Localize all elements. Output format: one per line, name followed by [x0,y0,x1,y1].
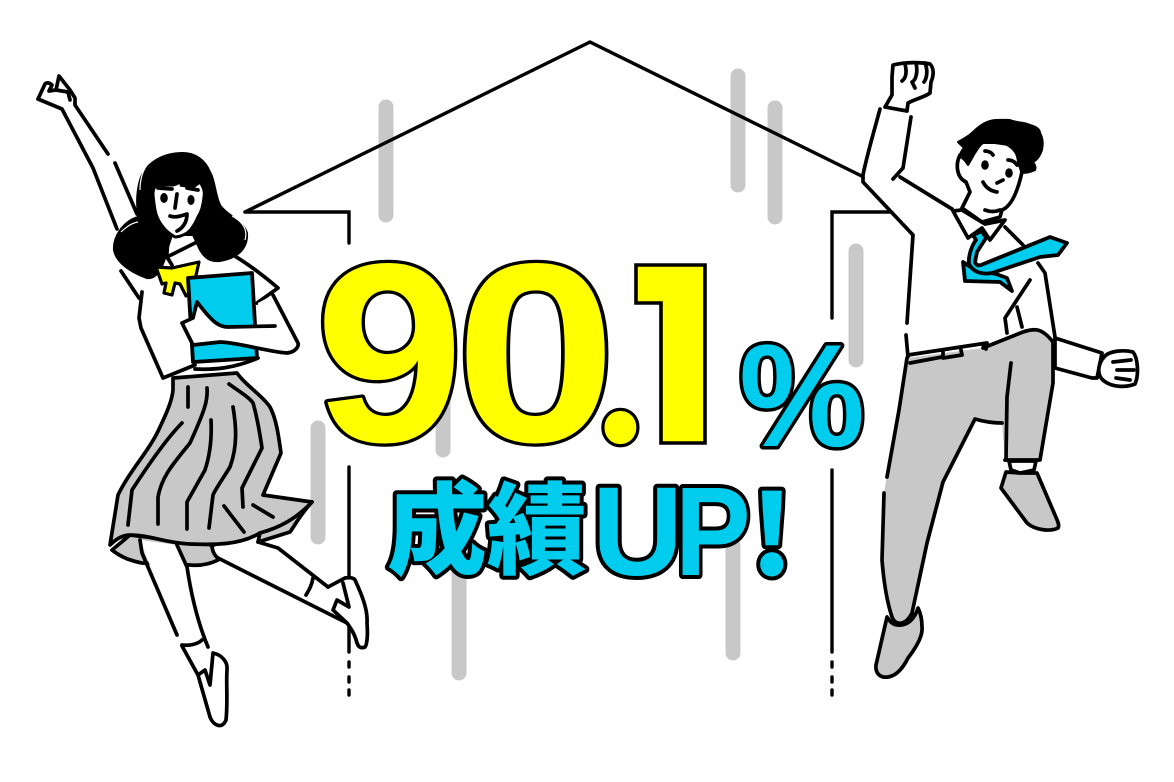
girl raised arm [38,76,137,229]
skirt pleats [128,384,273,532]
girl blouse [121,237,278,378]
girl face [153,178,204,237]
digit 1 [634,263,707,445]
digit 1: 1 [610,210,752,495]
man shirt body [863,109,1055,357]
man blue tie [963,231,1067,291]
girl hair [114,153,247,278]
man neck and head [957,140,1022,222]
man facial features [981,151,1017,212]
man raised arm outlines [863,109,1055,357]
headline 成績UP! [387,447,794,607]
man hair [958,120,1043,173]
man side fist [1099,351,1137,386]
letter U: U [592,461,683,602]
man lower shoe [876,608,922,677]
girl character [38,76,367,726]
man belt [908,343,987,363]
man upper shoe [1001,472,1059,530]
girl legs [140,540,367,726]
man raised fist [885,63,933,111]
man shirt collar [953,210,1005,240]
exclamation mark: ! [750,447,794,607]
letter P: P [675,461,751,602]
girl skirt [110,373,312,545]
man white sock [1009,461,1036,473]
man character [863,63,1137,677]
girl facial features [158,188,198,231]
girl skirt underside [112,535,218,565]
digit 0: 0 [455,210,617,495]
headline percentage [320,260,865,451]
trouser outlines [882,330,1053,623]
man right arm [1055,338,1102,378]
girl yellow bow [156,262,199,296]
house outline [245,42,890,695]
falling grey bars [318,76,856,673]
decimal point: . [594,269,647,486]
percent sign: % [739,315,865,477]
girl forearm and hand [182,295,298,353]
成績 kanji: 成績 [387,450,587,595]
digit 9: 9 [315,211,464,496]
blouse waist [195,358,258,369]
skirt hem flap [260,502,312,533]
girl blue book [188,273,257,362]
man trousers [882,330,1053,625]
